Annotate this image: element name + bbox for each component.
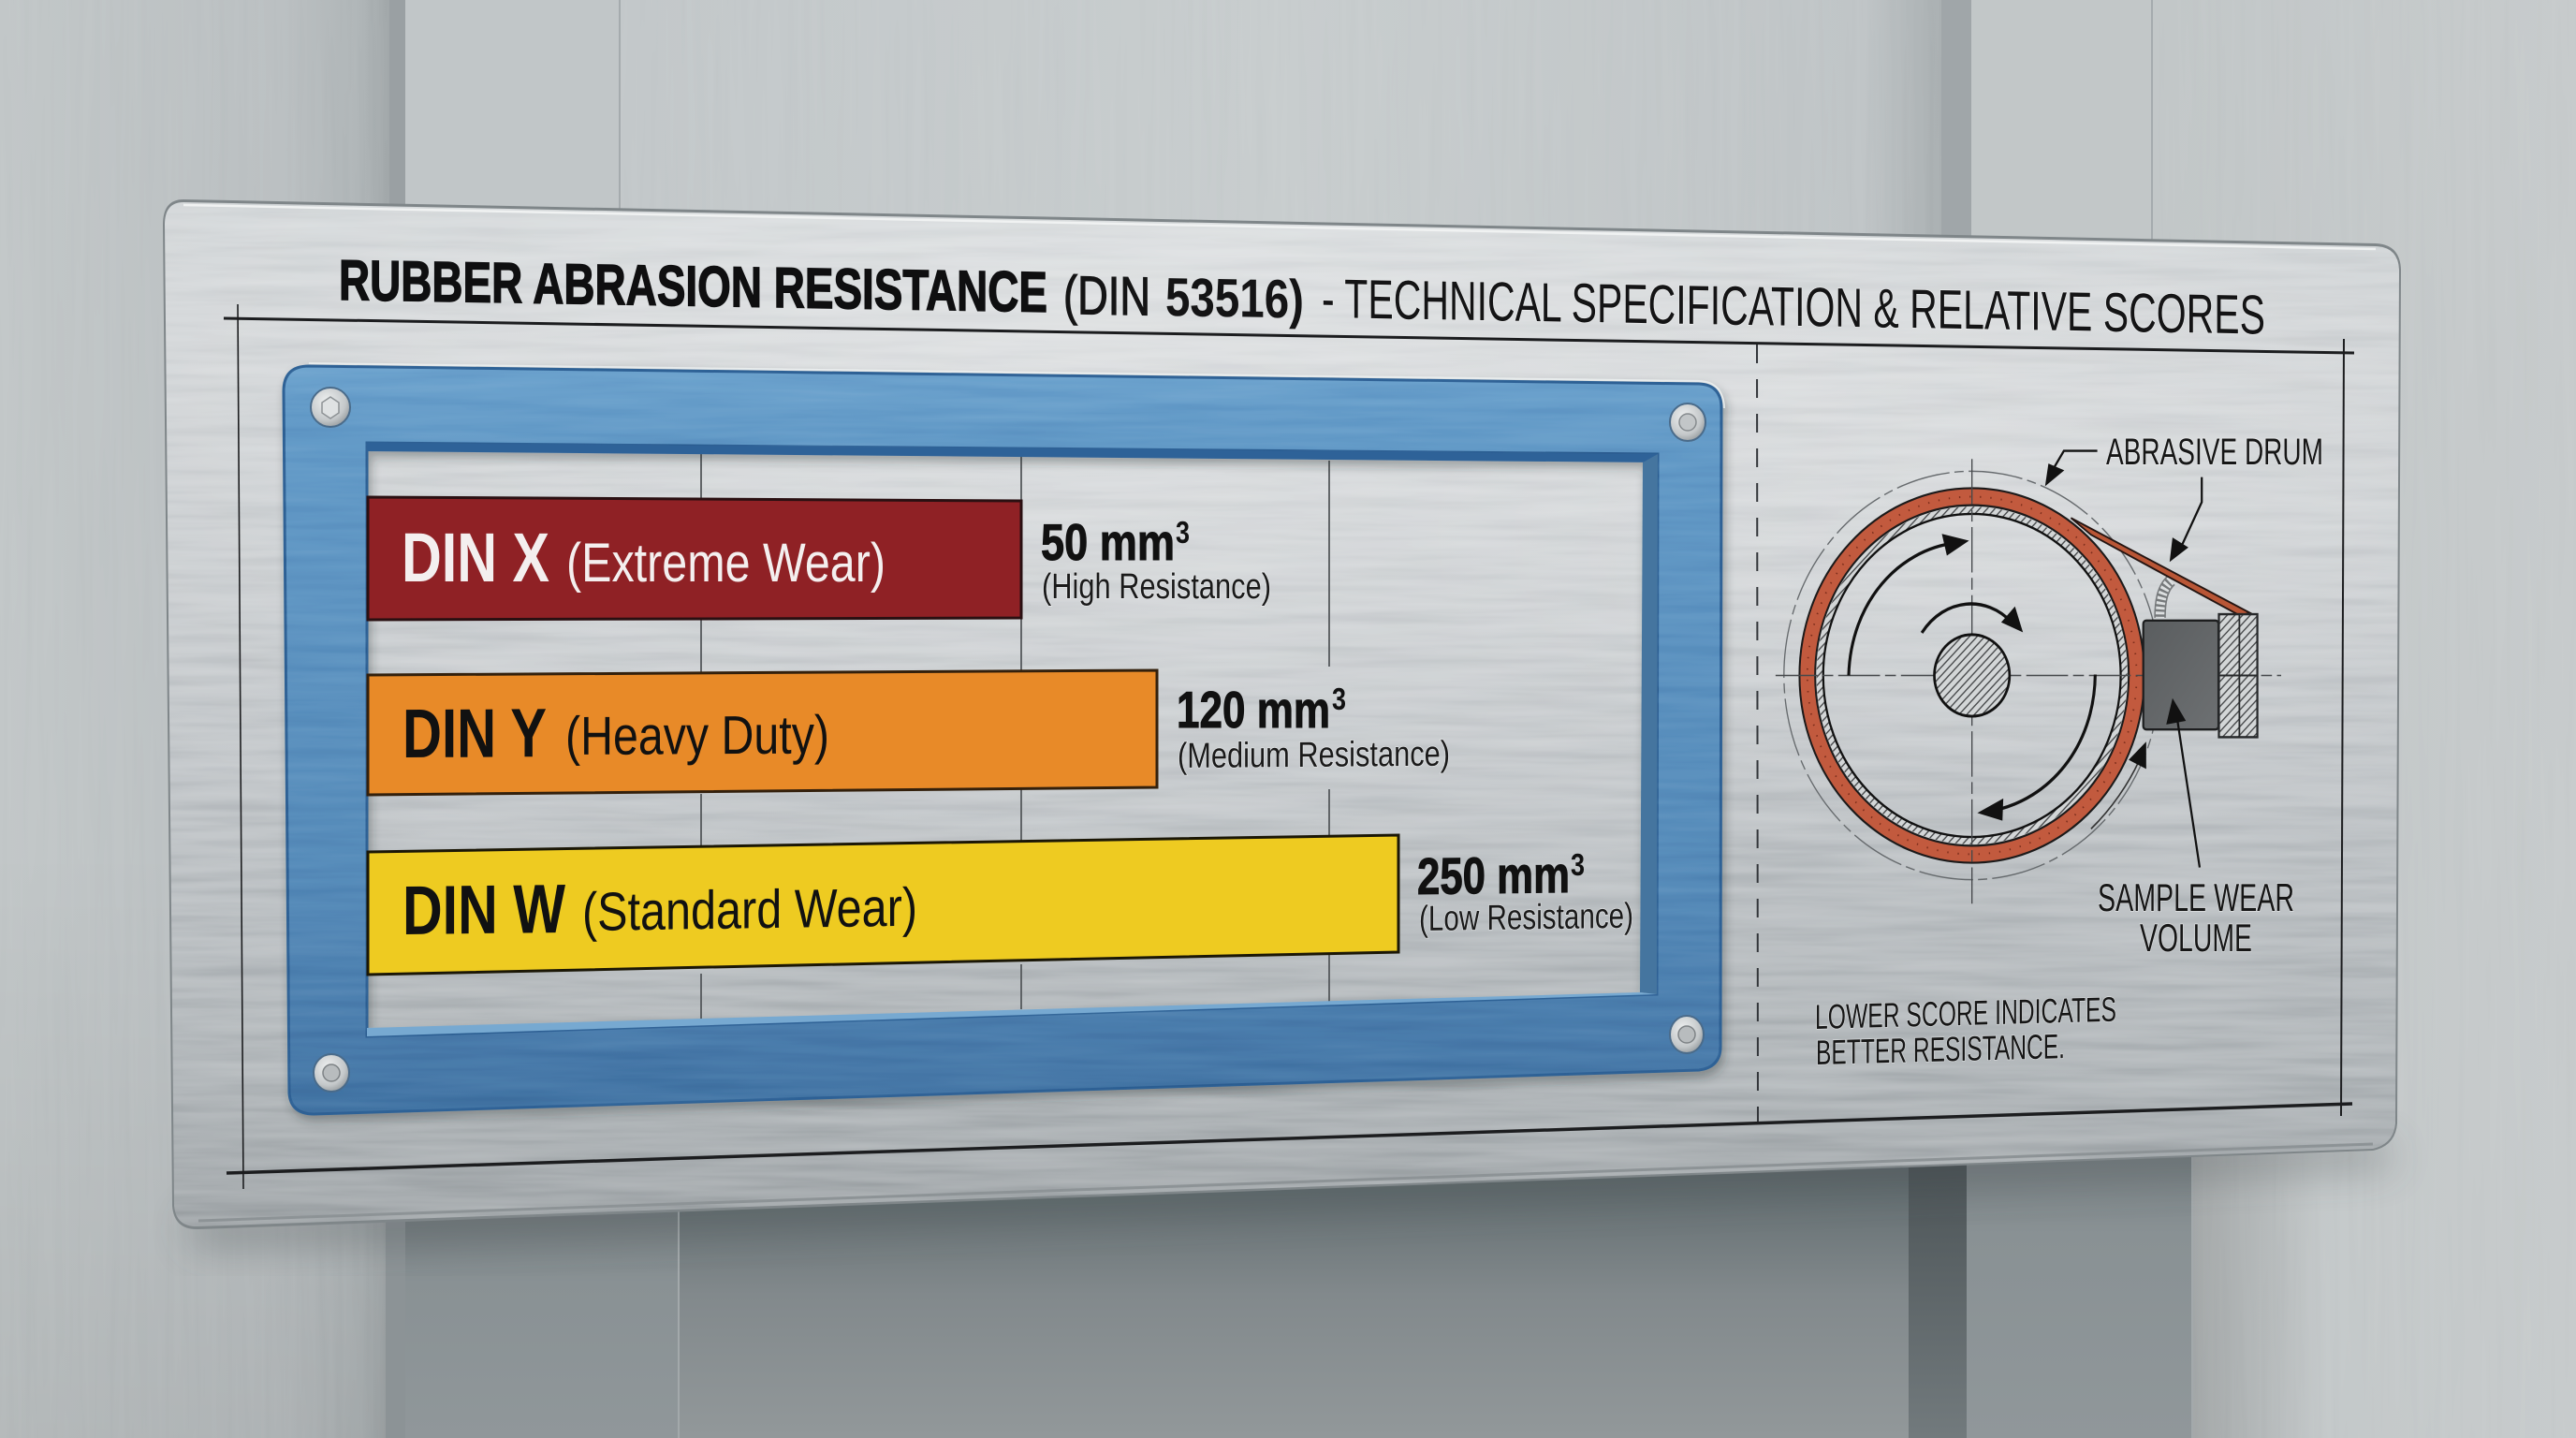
title: 53516) [1165, 267, 1304, 330]
outer dashed guide ring [1784, 471, 2160, 880]
bar: DIN W: (Standard Wear) [582, 877, 917, 943]
bar: DIN Y: DIN Y [402, 694, 547, 772]
title [339, 248, 2265, 346]
specimen block [2144, 621, 2218, 729]
hatched backing ring [1820, 510, 2124, 841]
blue frame [281, 363, 1727, 1118]
bar: DIN X: (Extreme Wear) [566, 533, 886, 594]
screw bottom left [314, 1054, 349, 1092]
value: DIN Y: 120 mm [1177, 681, 1330, 739]
bar: DIN W [368, 835, 1398, 975]
dashed divider [1757, 345, 1758, 1122]
value: DIN Y: (Medium Resistance) [1178, 735, 1450, 776]
note: lower score: LOWER SCORE INDICATES [1815, 990, 2116, 1036]
value: DIN W: 250 mm [1417, 845, 1570, 905]
value: DIN Y: 3 [1332, 682, 1346, 716]
value: DIN W [1417, 845, 1633, 939]
value: DIN W: 3 [1571, 847, 1585, 882]
lower mounting rail left [386, 1198, 680, 1438]
label: sample wear volume: SAMPLE WEAR [2098, 875, 2294, 919]
value: DIN X: (High Resistance) [1042, 567, 1271, 607]
hub [1935, 635, 2010, 716]
label: sample wear volume: VOLUME [2140, 916, 2252, 960]
bar: DIN X [368, 497, 1021, 620]
bar: DIN Y: (Heavy Duty) [565, 705, 829, 767]
rotation arrows [1849, 534, 2146, 829]
specimen holder [2219, 614, 2258, 737]
upper mounting rail left [389, 0, 621, 225]
note: lower score: BETTER RESISTANCE. [1816, 1027, 2065, 1072]
value: DIN X [1041, 513, 1271, 607]
chart grid lines [701, 453, 1329, 1020]
tube [2160, 580, 2172, 618]
plate shadow on wall [187, 1142, 2396, 1245]
value: DIN X: 3 [1176, 515, 1190, 550]
lower mounting rail right [1909, 1123, 2193, 1438]
screw top left [311, 388, 350, 427]
screw top right [1670, 404, 1705, 441]
bar: DIN X: DIN X [402, 519, 549, 596]
value: DIN Y [1177, 681, 1450, 776]
label: abrasive drum: ABRASIVE DRUM [2106, 432, 2323, 473]
upper mounting rail right [1941, 0, 2153, 262]
note: lower score [1815, 990, 2116, 1072]
brushed metal plate [159, 197, 2406, 1236]
abrasion test diagram [1776, 451, 2281, 903]
centre lines [1776, 459, 2281, 903]
title: RUBBER ABRASION RESISTANCE [339, 248, 1047, 324]
bar: DIN W: DIN W [402, 870, 565, 949]
screw bottom right [1670, 1016, 1704, 1053]
bar: DIN Y [368, 670, 1157, 795]
lower wall recess between rails [679, 1152, 1909, 1438]
belt [2071, 518, 2250, 616]
leader arrows [2045, 451, 2202, 868]
abrasive drum red ring [1808, 497, 2137, 854]
label: sample wear volume [2098, 875, 2294, 960]
title: (DIN [1063, 265, 1150, 328]
technical border lines [224, 304, 2354, 1189]
value: DIN W: (Low Resistance) [1419, 897, 1633, 939]
value: DIN X: 50 mm [1041, 513, 1175, 571]
